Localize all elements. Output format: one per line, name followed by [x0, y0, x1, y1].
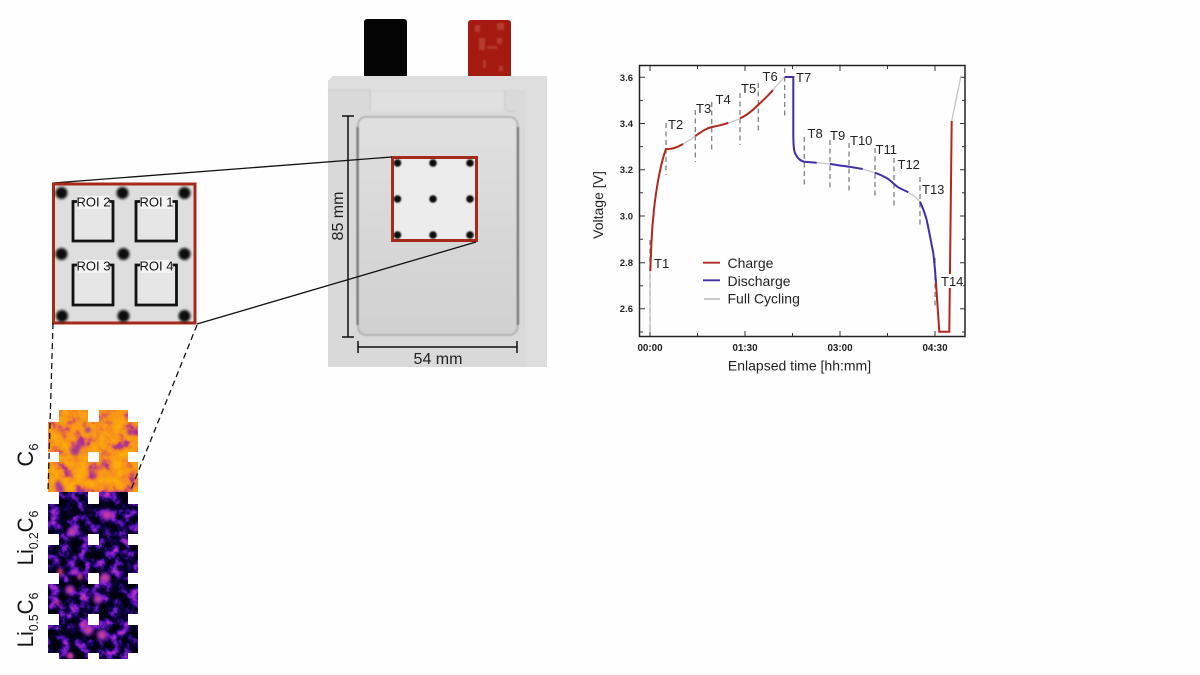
- negative tab (black): [364, 19, 407, 78]
- time point labels: T7: [796, 70, 811, 85]
- magnification lines: [53, 157, 476, 324]
- label: Li0.5C6: 0.5: [27, 614, 41, 631]
- label: Li0.5C6: Li: [13, 631, 38, 647]
- label: Li0.2C6: 6: [27, 511, 41, 517]
- time point labels: T4: [716, 92, 731, 107]
- x-axis tick labels: 00:00: [637, 343, 663, 354]
- legend: Full Cycling: [728, 290, 800, 306]
- label: C6: C: [13, 451, 38, 467]
- inner cell pocket: [358, 117, 518, 335]
- ROI 4: [136, 258, 176, 305]
- x-axis tick labels: 03:00: [827, 343, 853, 354]
- dimension: 85 mm: 85 mm: [330, 192, 347, 240]
- ROI 1: [136, 194, 176, 241]
- y-axis title: Voltage [V]: [590, 171, 606, 239]
- x-axis title: Enlapsed time [hh:mm]: [728, 358, 871, 374]
- x-axis tick labels: [637, 343, 948, 354]
- dashed projection lines: [48, 323, 197, 492]
- x-axis tick labels: 04:30: [922, 343, 948, 354]
- y-axis tick labels: 2.8: [620, 258, 633, 269]
- label: Li0.2C6: Li: [13, 549, 38, 565]
- legend: Discharge: [728, 273, 791, 289]
- plot frame and ticks: [640, 66, 965, 336]
- y-axis tick labels: [620, 73, 634, 315]
- dimension: 54 mm: 54 mm: [414, 351, 462, 368]
- time point labels: T12: [898, 157, 920, 172]
- charge trace: [650, 90, 952, 332]
- voltage chart: [590, 66, 965, 374]
- y-axis tick labels: 3.2: [620, 165, 633, 176]
- x-axis tick labels: 01:30: [732, 343, 758, 354]
- label: Li0.2C6: C: [13, 517, 38, 532]
- magnified ROI panel: [54, 184, 195, 323]
- ROI 1: ROI 1: [140, 194, 173, 210]
- full cycling trace: [650, 76, 961, 332]
- fiducial dots: [394, 159, 474, 239]
- time point labels: T5: [741, 81, 756, 96]
- label: C6: 6: [26, 443, 41, 451]
- heat map: Li0.2C6: [48, 492, 138, 660]
- heat maps: [48, 410, 138, 660]
- positive tab (red): [468, 20, 511, 78]
- label: Li0.5C6: 6: [27, 593, 41, 599]
- legend: [703, 255, 800, 306]
- discharge trace: [785, 77, 936, 283]
- ROI 2: [73, 194, 113, 241]
- time point labels: T3: [696, 101, 711, 116]
- heat map: C6: [48, 410, 138, 493]
- time point labels: [654, 69, 963, 289]
- y-axis tick labels: 3.6: [620, 73, 633, 84]
- pouch cell photo: [328, 19, 547, 367]
- cell body: [328, 76, 547, 367]
- y-axis tick labels: 3.0: [620, 212, 633, 222]
- ROI 2: ROI 2: [77, 194, 110, 210]
- small ROI window on cell: [392, 158, 476, 240]
- ROI 3: [73, 258, 113, 305]
- time point labels: T9: [830, 128, 845, 143]
- fiducial dots: [56, 187, 190, 322]
- time point labels: T11: [876, 142, 897, 157]
- time point labels: T6: [762, 69, 778, 84]
- dimension: 85 mm: [330, 116, 354, 337]
- time point labels: T2: [668, 117, 683, 132]
- time point labels: T13: [922, 182, 944, 197]
- time point labels: T10: [850, 133, 872, 148]
- label: Li0.2C6: 0.2: [27, 532, 41, 549]
- time point labels: T1: [654, 256, 669, 271]
- dimension: 54 mm: [358, 341, 517, 368]
- y-axis tick labels: 2.6: [620, 304, 633, 315]
- dashed time markers: [650, 68, 935, 332]
- time point labels: T8: [808, 126, 823, 141]
- time point labels: T14: [941, 274, 963, 289]
- legend: Charge: [728, 255, 774, 271]
- ROI 4: ROI 4: [140, 258, 173, 274]
- label: Li0.5C6: C: [13, 599, 38, 614]
- ROI 3: ROI 3: [77, 258, 110, 274]
- y-axis tick labels: 3.4: [620, 119, 634, 130]
